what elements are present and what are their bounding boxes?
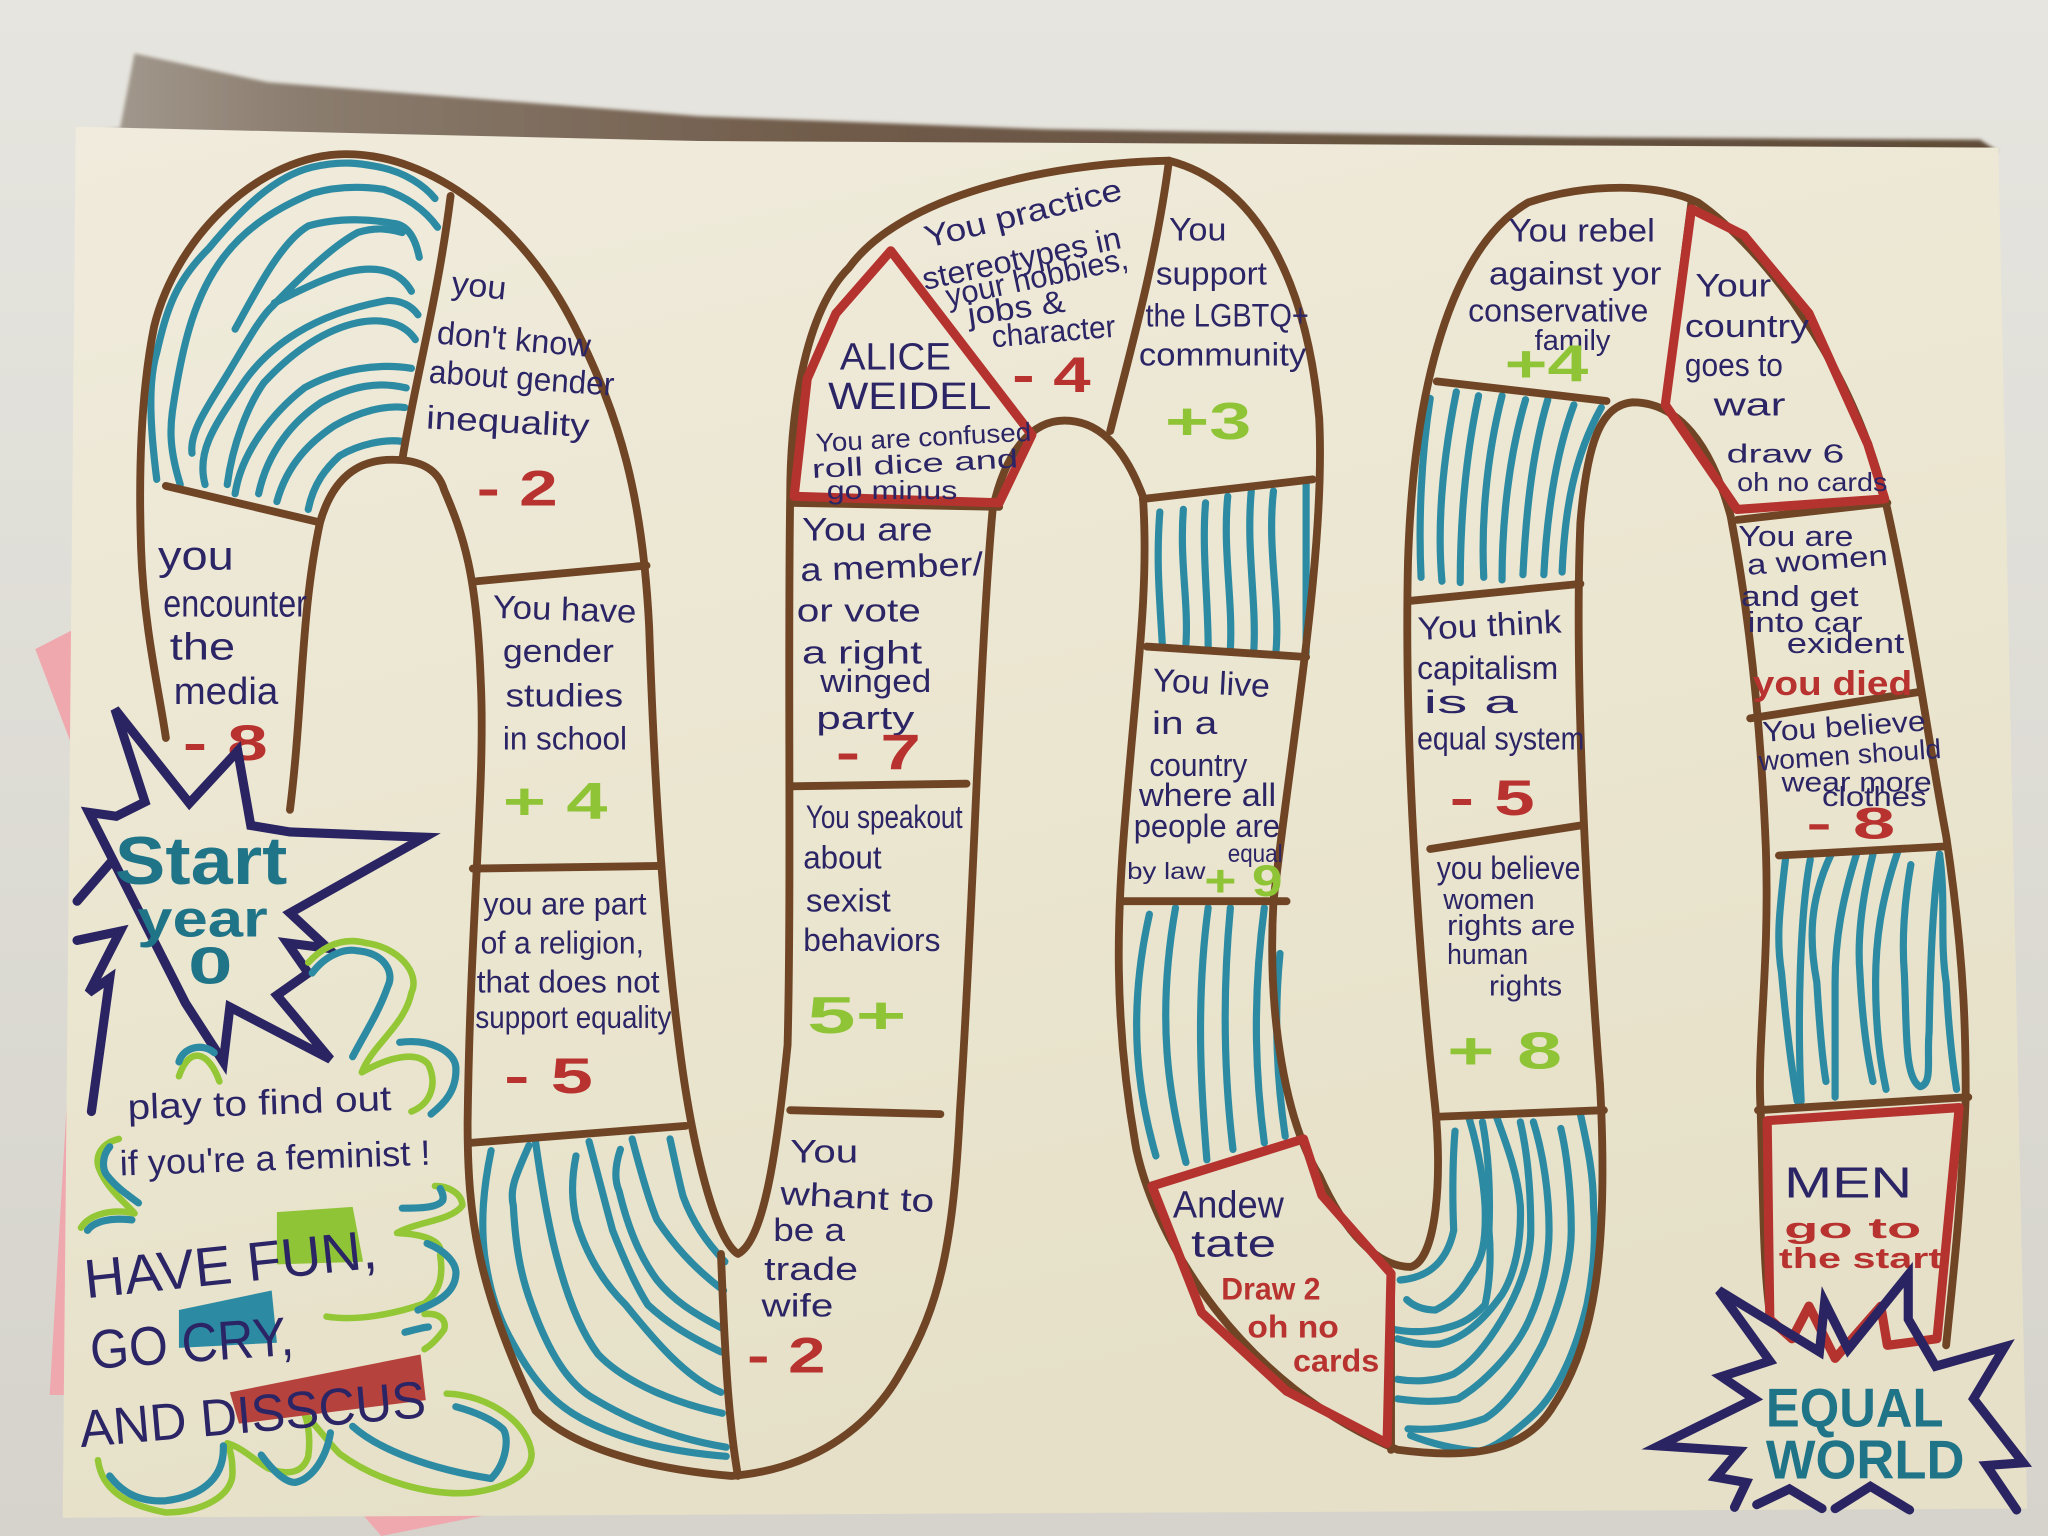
square: your country goes to war: oh no cards — [1737, 467, 1887, 497]
shadow above paper — [78, 54, 1998, 152]
square: religion that does not support equality: you are part — [483, 886, 647, 921]
square: you are a woman and get into car accident: into car — [1748, 607, 1863, 639]
square: you believe women should wear more clothes: - 8 — [1806, 800, 1895, 849]
start burst: year — [137, 890, 268, 948]
square: you think capitalism is an equal system: is a — [1424, 683, 1519, 720]
square: you believe women rights are human rights: women — [1442, 884, 1535, 916]
square: member or voter of right winged party: a right — [802, 634, 922, 671]
square: you live in a country where all people are equal by law: + 9 — [1204, 857, 1283, 906]
square: religion that does not support equality: that does not — [477, 965, 660, 1000]
square: you live in a country where all people are equal by law: in a — [1152, 704, 1218, 741]
square: you speak out about sexist behaviors: sexist — [806, 882, 891, 919]
square: you don't know about gender inequality: you — [450, 264, 508, 307]
finish burst equal world — [1659, 1275, 2023, 1510]
square: men go to the start: MEN — [1784, 1160, 1912, 1208]
square: you encounter the media: media — [174, 671, 279, 713]
square: your country goes to war — [1665, 209, 1887, 509]
square: you rebel against your conservative family: family — [1535, 325, 1611, 357]
square: you encounter the media: encounter — [163, 583, 307, 625]
square: you don't know about gender inequality: inequality — [425, 398, 591, 444]
square: you speak out about sexist behaviors — [803, 798, 963, 1045]
square: your country goes to war: country — [1685, 307, 1810, 344]
square: you live in a country where all people are equal by law: by law — [1127, 858, 1207, 884]
square: you think capitalism is an equal system: capitalism — [1417, 649, 1558, 686]
square: you think capitalism is an equal system: equal system — [1417, 720, 1584, 757]
square: you practice stereotypes: character — [990, 309, 1117, 354]
square: you want to be a trade wife: be a — [773, 1211, 846, 1248]
square: you think capitalism is an equal system — [1417, 602, 1584, 826]
square: you are a woman and get into car accident: exident — [1787, 628, 1904, 660]
square: you are a woman and get into car accident: and get — [1741, 581, 1859, 613]
square: member or voter of right winged party: - 7 — [836, 724, 921, 780]
square: Andrew Tate — [1152, 1139, 1391, 1443]
slogan: have fun, go cry, and discuss: HAVE FUN, — [81, 1218, 380, 1310]
square: Alice Weidel: You are confused — [815, 417, 1032, 458]
square: Andrew Tate: Draw 2 — [1221, 1272, 1320, 1307]
square: religion that does not support equality — [475, 886, 672, 1104]
square: you believe women should wear more clothes — [1757, 706, 1942, 849]
square: member or voter of right winged party: a member/ — [800, 545, 985, 588]
square: you rebel against your conservative family: +4 — [1505, 335, 1588, 393]
square: you encounter the media: - 8 — [183, 715, 268, 771]
square: men go to the start — [1767, 1108, 1959, 1358]
square: Alice Weidel — [794, 251, 1032, 505]
square: you don't know about gender inequality: - 2 — [477, 460, 558, 516]
square: men go to the start: the start — [1779, 1243, 1943, 1275]
square: you rebel against your conservative family: conservative — [1468, 291, 1648, 328]
square: Alice Weidel: go minus — [827, 475, 957, 505]
square: you want to be a trade wife: whant to — [778, 1174, 935, 1219]
tagline: play to find out if you're a feminist: if you're a feminist ! — [119, 1134, 431, 1184]
square: you think capitalism is an equal system: - 5 — [1450, 770, 1535, 826]
square: your country goes to war: war — [1712, 385, 1786, 422]
square: your country goes to war: Your — [1695, 266, 1771, 303]
square: you live in a country where all people are equal by law: people are — [1134, 807, 1280, 844]
square: you have gender studies in school: gender — [503, 632, 614, 669]
square: you speak out about sexist behaviors: 5+ — [807, 987, 906, 1045]
square: you support the LGBTQ+ community: You — [1169, 210, 1226, 247]
slogan: have fun, go cry, and discuss — [77, 1207, 428, 1459]
square: you support the LGBTQ+ community: community — [1139, 336, 1307, 373]
square: you speak out about sexist behaviors: behaviors — [803, 921, 940, 958]
square: your country goes to war: draw 6 — [1727, 438, 1844, 468]
square: you encounter the media — [158, 532, 307, 771]
square: Andrew Tate: tate — [1191, 1223, 1276, 1265]
square: you encounter the media: you — [158, 532, 234, 578]
square: you live in a country where all people are equal by law: equal — [1228, 841, 1283, 868]
square: you believe women rights are human rights: you believe — [1437, 849, 1580, 886]
square: you want to be a trade wife: wife — [760, 1287, 833, 1324]
square: you have gender studies in school: studies — [505, 677, 623, 714]
square: you are a woman and get into car accident: a women — [1746, 540, 1889, 582]
finish burst equal world: EQUAL — [1766, 1376, 1944, 1438]
square: member or voter of right winged party: winged — [819, 662, 931, 699]
square: your country goes to war: goes to — [1685, 346, 1783, 383]
tagline: play to find out if you're a feminist: play to find out — [127, 1079, 392, 1127]
square: Andrew Tate: cards — [1293, 1343, 1379, 1378]
square: you believe women should wear more clothes: wear more — [1780, 767, 1932, 798]
square: you encounter the media: the — [170, 627, 235, 669]
square: you want to be a trade wife: trade — [764, 1250, 858, 1287]
square: you want to be a trade wife: - 2 — [747, 1328, 825, 1384]
start burst — [77, 709, 424, 1112]
square: you speak out about sexist behaviors: You speakout — [806, 798, 963, 835]
square: you want to be a trade wife — [747, 1132, 935, 1384]
square: you believe women rights are human rights: + 8 — [1447, 1022, 1562, 1080]
square: you are a woman and get into car accident: You are — [1738, 521, 1853, 553]
square: religion that does not support equality: support equality — [475, 1000, 672, 1035]
hatched blank squares — [151, 163, 1957, 1456]
square: you don't know about gender inequality — [425, 264, 616, 516]
slogan: have fun, go cry, and discuss: GO CRY, — [88, 1305, 296, 1381]
finish burst equal world: WORLD — [1766, 1429, 1964, 1491]
square: you live in a country where all people are equal by law: where all — [1138, 776, 1276, 813]
square: you practice stereotypes: your hobbies, — [942, 241, 1131, 314]
square: you rebel against your conservative family: against yor — [1489, 255, 1662, 292]
square: Andrew Tate: Andew — [1173, 1184, 1285, 1226]
square: you rebel against your conservative family: You rebel — [1509, 212, 1655, 249]
square: you believe women rights are human rights: rights are — [1447, 910, 1575, 942]
square: you think capitalism is an equal system: You think — [1417, 602, 1563, 647]
square: you believe women should wear more clothes: You believe — [1762, 706, 1927, 749]
square: you believe women rights are human rights: human — [1447, 939, 1528, 971]
square: you rebel against your conservative family — [1468, 212, 1662, 393]
square: you live in a country where all people are equal by law — [1127, 661, 1283, 906]
square: you don't know about gender inequality: don't know — [436, 314, 593, 364]
square: you live in a country where all people are equal by law: country — [1149, 746, 1248, 783]
square: you practice stereotypes: jobs & — [964, 284, 1067, 332]
start burst: 0 — [188, 938, 232, 996]
square: Alice Weidel: WEIDEL — [828, 376, 991, 418]
square: you support the LGBTQ+ community: +3 — [1165, 393, 1251, 451]
square: you don't know about gender inequality: about gender — [428, 353, 616, 403]
square: you practice stereotypes: You practice — [921, 172, 1125, 255]
square: member or voter of right winged party — [797, 511, 985, 780]
square: you believe women should wear more clothes: clothes — [1822, 781, 1927, 812]
square: you want to be a trade wife: You — [790, 1132, 858, 1169]
square: you have gender studies in school — [492, 588, 637, 831]
square: you support the LGBTQ+ community — [1139, 210, 1309, 451]
square: you believe women rights are human rights: rights — [1489, 970, 1562, 1002]
square: member or voter of right winged party: You are — [802, 511, 933, 548]
pink sheet behind paper — [35, 627, 486, 1536]
square: men go to the start: go to — [1784, 1213, 1921, 1245]
square: you have gender studies in school: in school — [503, 720, 627, 757]
square: religion that does not support equality: - 5 — [504, 1048, 593, 1104]
square: Alice Weidel: roll dice and — [811, 443, 1019, 484]
decorative marker squiggles — [81, 941, 532, 1512]
square: religion that does not support equality: of a religion, — [481, 925, 644, 960]
square: member or voter of right winged party: or vote — [797, 592, 921, 629]
square: Alice Weidel: ALICE — [840, 337, 951, 379]
board path outline — [140, 154, 1968, 1476]
square: you speak out about sexist behaviors: about — [803, 839, 882, 876]
start burst: Start — [115, 824, 287, 899]
square: you believe women rights are human rights — [1437, 849, 1580, 1080]
slogan: have fun, go cry, and discuss: AND DISSCUS — [77, 1371, 428, 1459]
square: you have gender studies in school: + 4 — [503, 773, 607, 831]
square: member or voter of right winged party: party — [816, 699, 915, 736]
square: Andrew Tate: oh no — [1247, 1309, 1339, 1344]
tagline: play to find out if you're a feminist — [119, 1079, 431, 1184]
square: you practice stereotypes: stereotypes in — [919, 220, 1124, 297]
square: you are a woman and get into car accident — [1738, 521, 1912, 703]
square: you have gender studies in school: You have — [492, 588, 637, 630]
square: you practice stereotypes: - 4 — [1012, 347, 1091, 403]
square: you support the LGBTQ+ community: the LGBTQ+ — [1145, 297, 1309, 334]
square: you believe women should wear more clothes: women should — [1757, 733, 1942, 777]
square: you are a woman and get into car accident: you died — [1753, 665, 1912, 703]
square: you practice stereotypes — [919, 172, 1131, 403]
square: you live in a country where all people are equal by law: You live — [1152, 661, 1271, 704]
square: you support the LGBTQ+ community: support — [1156, 255, 1267, 292]
